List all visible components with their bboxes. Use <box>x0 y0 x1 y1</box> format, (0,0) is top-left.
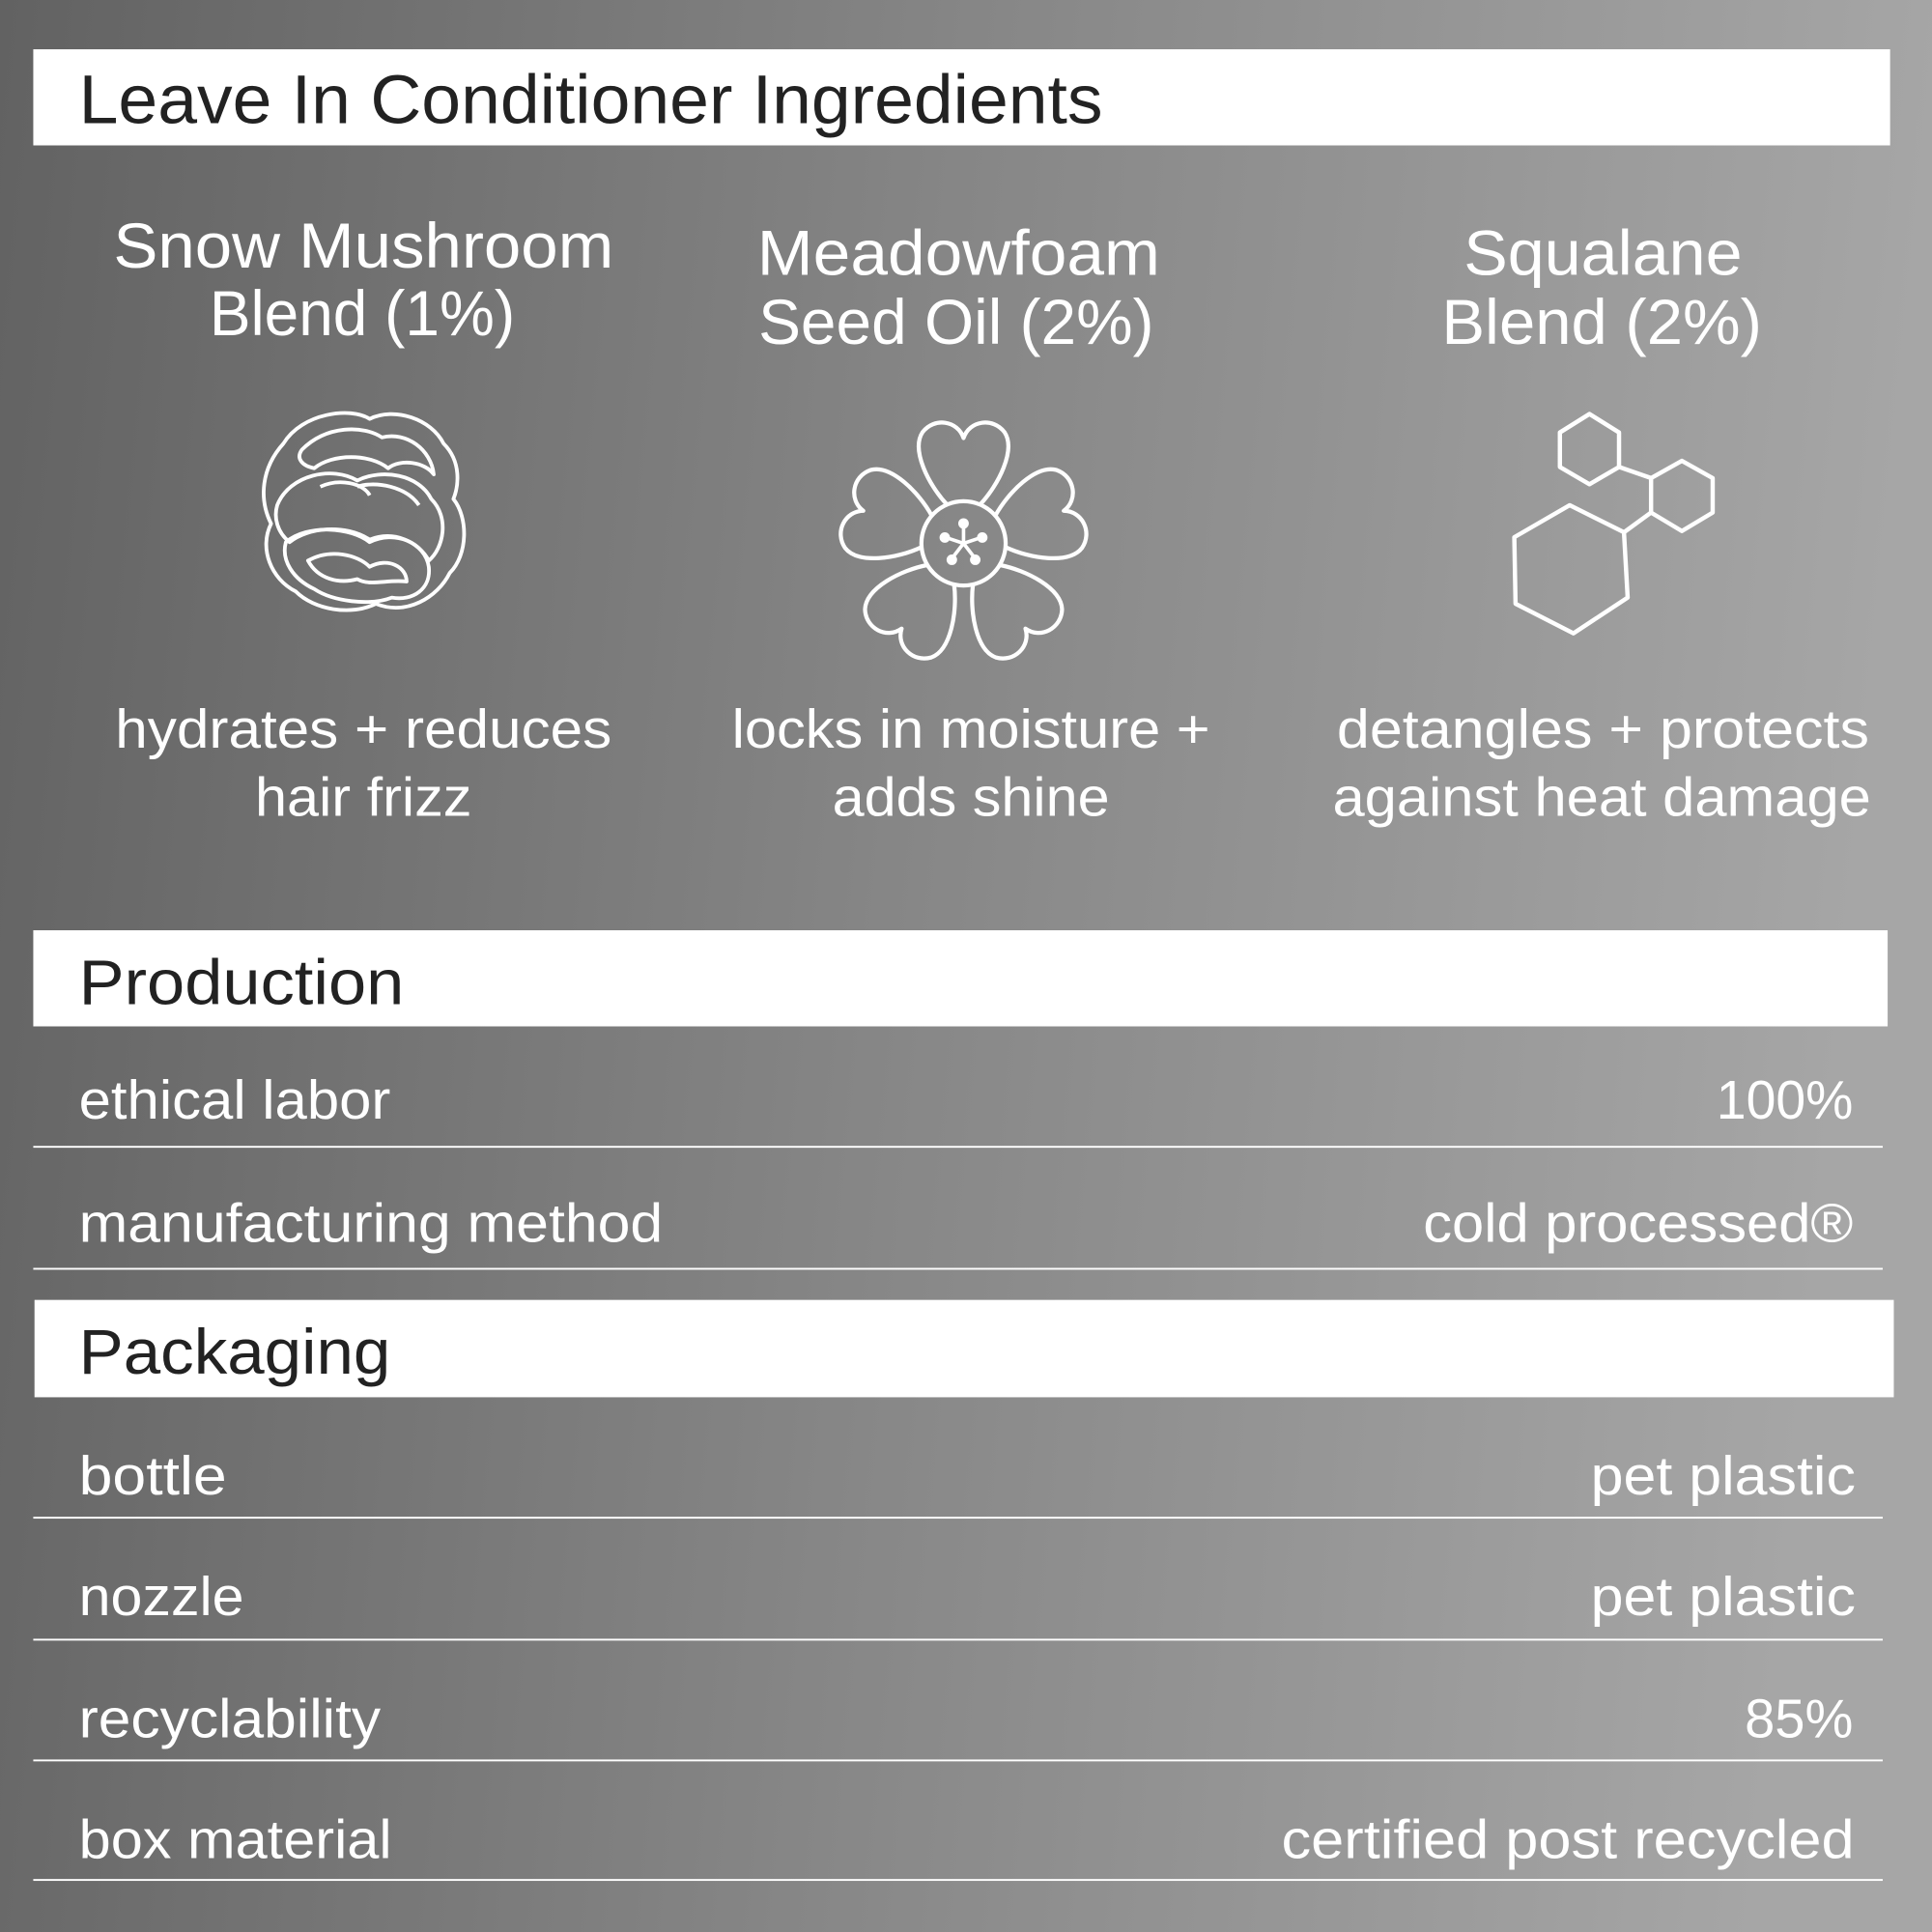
heading: snow mushroom <box>113 211 613 350</box>
ingredient: squalane blend <box>1332 217 1871 827</box>
icon: flower <box>835 422 1093 668</box>
row: nozzle: nozzle <box>79 1566 244 1627</box>
packaging rows <box>33 1445 1883 1881</box>
description: squalane: against heat damage <box>1332 766 1871 827</box>
row: nozzle: pet plastic <box>1591 1566 1856 1627</box>
heading: squalane: Squalane <box>1463 217 1743 289</box>
row: box material <box>33 1808 1883 1881</box>
packaging header: Packaging <box>79 1317 390 1388</box>
heading: meadowfoam: Seed Oil (2%) <box>758 287 1154 358</box>
row: manufacturing method <box>33 1193 1883 1269</box>
row: recyclability: 85% <box>1745 1688 1853 1748</box>
description: squalane: detangles + protects <box>1337 698 1869 759</box>
description: snow mushroom <box>115 698 611 827</box>
heading: squalane <box>1441 217 1762 358</box>
row: box material: certified post recycled <box>1282 1808 1855 1869</box>
ingredient: snow mushroom <box>113 211 613 827</box>
row: manufacturing method: manufacturing method <box>79 1193 663 1254</box>
row: ethical labor: ethical labor <box>79 1069 390 1130</box>
production header: Production <box>79 948 404 1019</box>
icon: hexagons <box>1515 414 1713 634</box>
row: bottle: bottle <box>79 1445 227 1506</box>
row: box material: box material <box>79 1808 392 1869</box>
heading: meadowfoam <box>757 217 1160 358</box>
row: bottle: pet plastic <box>1591 1445 1856 1506</box>
heading: squalane: Blend (2%) <box>1441 287 1762 358</box>
packaging header <box>35 1300 1893 1397</box>
icon: snow mushroom <box>264 413 464 611</box>
description: meadowfoam: adds shine <box>833 766 1110 827</box>
row: nozzle <box>33 1566 1883 1640</box>
description: meadowfoam <box>732 698 1210 827</box>
ingredient: meadowfoam seed oil <box>732 217 1210 827</box>
production header <box>33 930 1888 1026</box>
description: meadowfoam: locks in moisture + <box>732 698 1210 759</box>
row: ethical labor <box>33 1069 1883 1148</box>
description: snow mushroom: hair frizz <box>255 766 472 827</box>
description: squalane <box>1332 698 1871 827</box>
row: ethical labor: 100% <box>1717 1069 1853 1130</box>
heading: snow mushroom: Blend (1%) <box>210 278 515 350</box>
row: recyclability: recyclability <box>79 1688 381 1748</box>
title bar: Leave In Conditioner Ingredients <box>79 62 1103 139</box>
row: manufacturing method: cold processed® <box>1423 1193 1853 1254</box>
production rows <box>33 1069 1883 1269</box>
heading: meadowfoam: Meadowfoam <box>757 217 1160 289</box>
description: snow mushroom: hydrates + reduces <box>115 698 611 759</box>
heading: snow mushroom: Snow Mushroom <box>113 211 613 282</box>
row: recyclability <box>33 1688 1883 1761</box>
title bar <box>33 49 1890 146</box>
row: bottle <box>33 1445 1883 1519</box>
